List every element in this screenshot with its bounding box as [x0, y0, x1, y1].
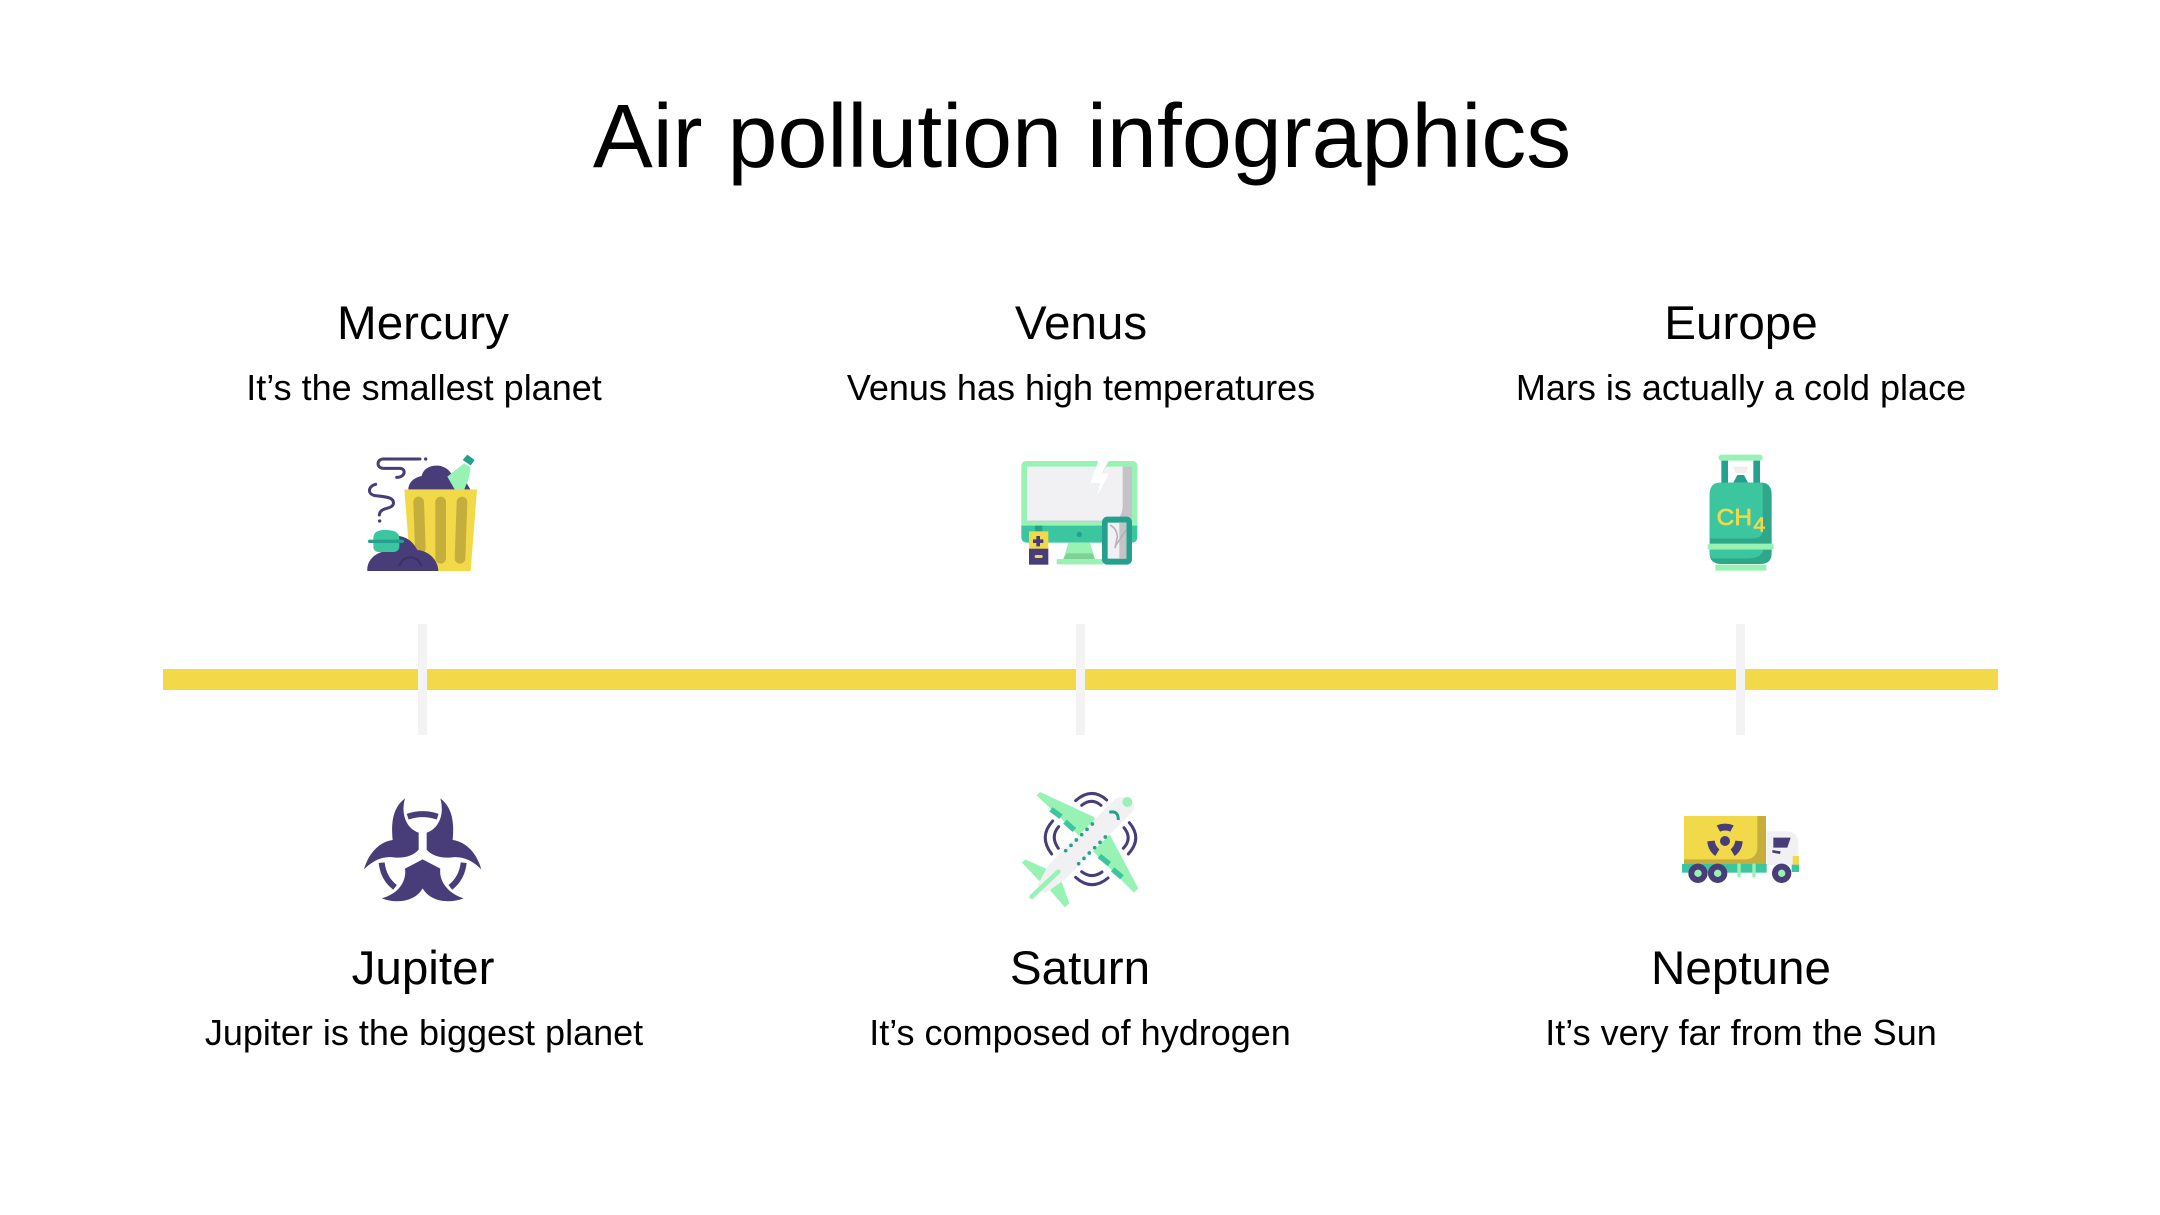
icon: CH4 gas cylinder: CH [1717, 504, 1752, 530]
icon: broken computer and phone with battery [1021, 461, 1137, 565]
text: Mercury description: It’s the smallest planet [246, 367, 602, 408]
timeline bar [163, 624, 1998, 735]
heading: Venus: Venus [1015, 297, 1147, 350]
heading: Saturn: Saturn [1010, 942, 1150, 995]
heading: Mercury: Mercury [337, 297, 509, 350]
text: Europe description: Mars is actually a cold place [1516, 367, 1966, 408]
text: Saturn description: It’s composed of hydrogen [869, 1012, 1291, 1053]
icon: trash can with garbage [367, 455, 477, 571]
heading: Neptune: Neptune [1651, 942, 1831, 995]
heading: Jupiter: Jupiter [352, 942, 495, 995]
text: Neptune description: It’s very far from the Sun [1545, 1012, 1937, 1053]
text: Jupiter description: Jupiter is the biggest planet [205, 1012, 643, 1053]
icon: biohazard symbol [364, 798, 481, 901]
icon: CH4 gas cylinder: 4 [1753, 514, 1765, 537]
title: Air pollution infographics [593, 87, 1571, 187]
icon: CH4 gas cylinder [1708, 455, 1774, 571]
heading: Europe: Europe [1664, 297, 1818, 350]
icon: airplane with noise waves [1022, 792, 1138, 907]
text: Venus description: Venus has high temperatures [847, 367, 1315, 408]
icon: radioactive truck [1682, 816, 1799, 883]
